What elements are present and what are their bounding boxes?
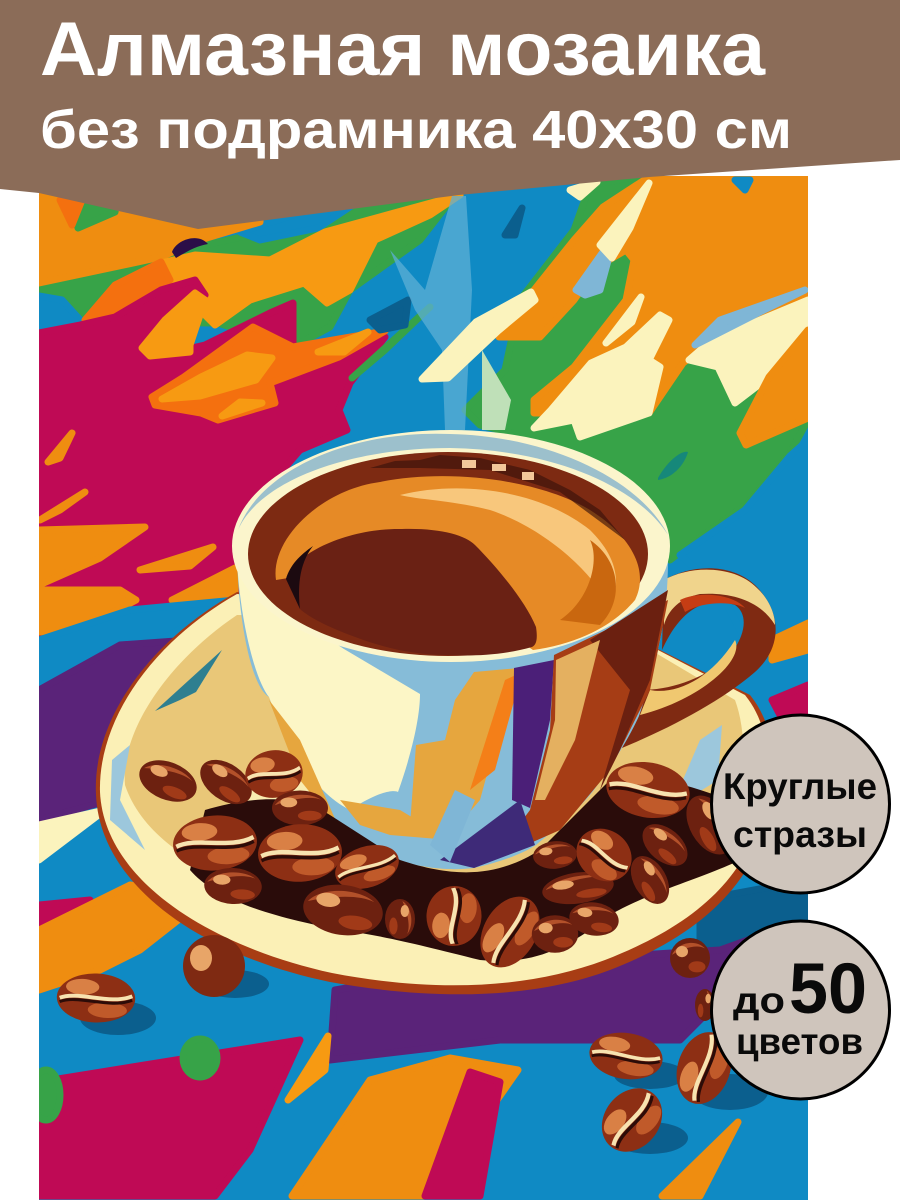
saucer [96,592,773,994]
coffee in cup [232,430,670,662]
left patches [39,527,145,585]
loose beans [56,935,768,1164]
badge: up to 50 colours: 50 [789,950,867,1029]
badge: up to 50 colours [712,921,890,1099]
header banner [0,0,900,229]
coffee beans on saucer [133,746,743,978]
badge: up to 50 colours: до [733,980,785,1021]
steam [390,196,535,430]
right colour masses [465,176,808,560]
cup handle [622,568,776,748]
subtitle: без подрамника 40х30 см [40,100,792,160]
badge: round rhinestones [712,715,890,893]
painting: coffee cup on colourful background [32,176,808,1200]
badge: round rhinestones: стразы [733,814,867,855]
badge: up to 50 colours: цветов [736,1021,863,1062]
badge: round rhinestones: Круглые [723,766,877,807]
lower patches [696,885,808,948]
title: Алмазная мозаика [40,7,766,92]
cup body [237,560,668,869]
background colour fields [32,176,808,1200]
